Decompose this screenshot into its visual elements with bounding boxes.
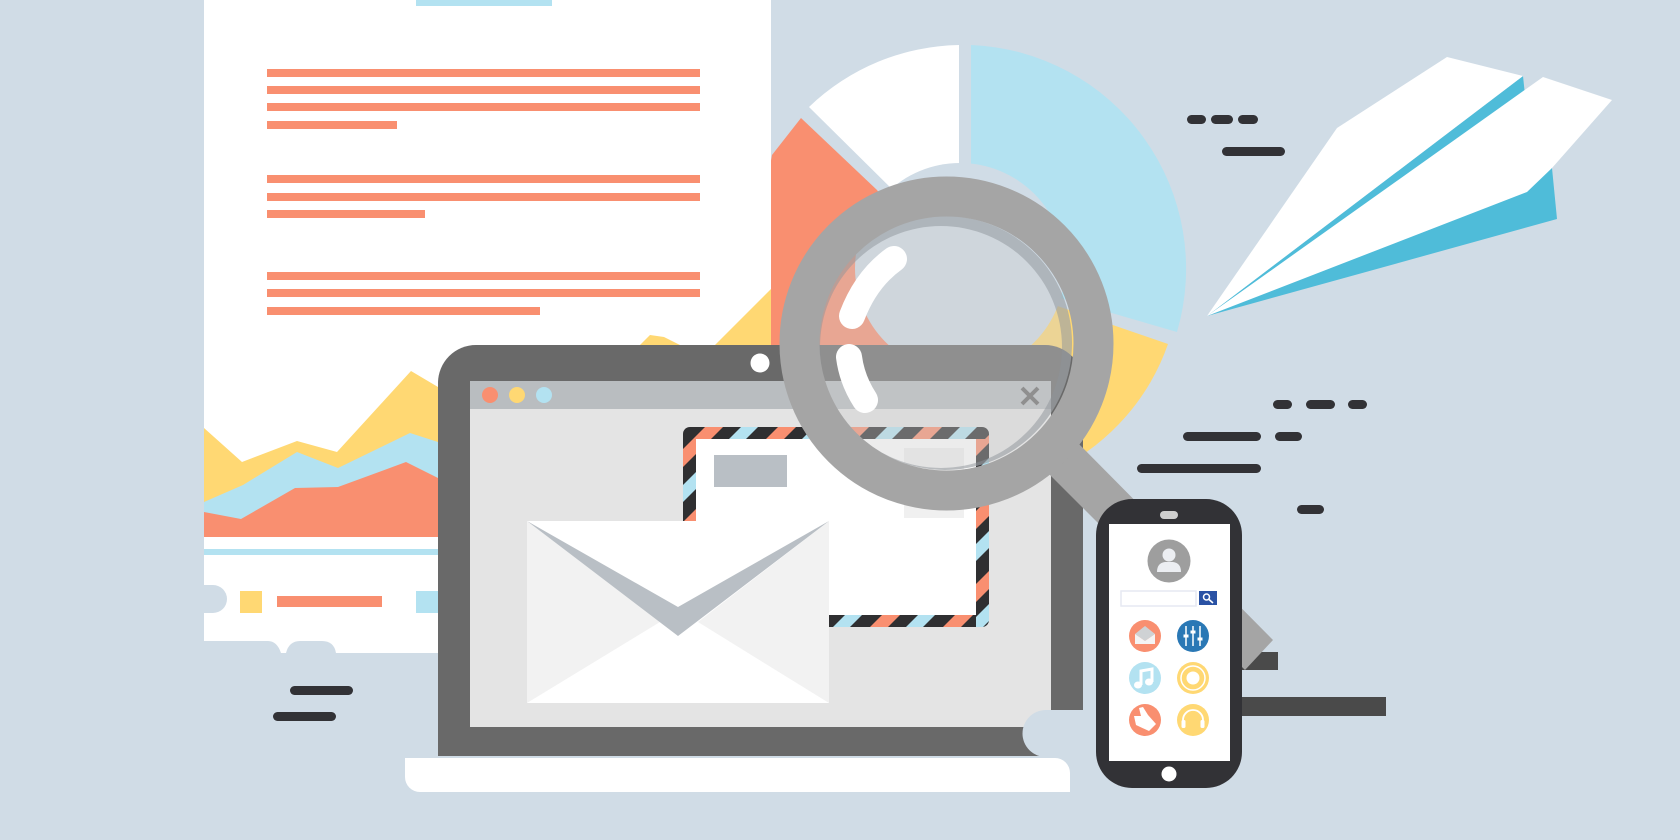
area chart — [204, 288, 772, 537]
legend notch — [204, 585, 227, 613]
text lines: paragraph 3 — [267, 272, 700, 315]
lens ring — [800, 196, 1094, 490]
laptop base — [405, 758, 1070, 792]
dark bars behind phone — [1230, 652, 1386, 716]
motion dashes: top — [1187, 115, 1285, 156]
pie chart — [738, 45, 1186, 468]
text lines: paragraph 2 — [267, 175, 700, 218]
corner cut-out — [1022, 710, 1090, 757]
motion dashes: right — [1137, 400, 1367, 514]
home button — [1162, 766, 1176, 782]
app icon: headphones — [1177, 704, 1209, 736]
pie slice: orange — [738, 118, 930, 345]
laptop — [405, 345, 1090, 792]
lens glass — [818, 216, 1072, 470]
pie slice: blue — [971, 45, 1186, 332]
area: blue — [204, 433, 438, 519]
pie slice: white — [809, 45, 959, 220]
legend bar: orange — [277, 596, 382, 607]
pie slice: yellow — [1000, 300, 1168, 468]
legend swatch: yellow — [240, 591, 262, 613]
plane fold: upper blue — [1207, 76, 1525, 316]
right wing — [1207, 77, 1612, 316]
highlight: lower — [849, 357, 865, 400]
speaker — [1160, 511, 1178, 519]
handle — [1045, 440, 1273, 670]
camera dot — [750, 354, 770, 372]
plane fold: lower blue — [1207, 168, 1557, 316]
paper plane — [1207, 57, 1612, 316]
address block — [714, 455, 787, 487]
document page — [204, 0, 772, 653]
envelope — [527, 521, 829, 703]
left wing — [1207, 57, 1523, 316]
search box — [1121, 591, 1196, 606]
app icon: thumbs up — [1129, 704, 1161, 736]
flap shadow — [527, 521, 829, 636]
area: yellow — [204, 289, 771, 502]
app icon: equalizer — [1177, 620, 1209, 652]
text lines: paragraph 1 — [267, 69, 700, 129]
app icon: music — [1129, 662, 1161, 694]
avatar icon — [1148, 540, 1190, 582]
letter paper — [696, 439, 976, 615]
highlight: upper — [852, 259, 894, 316]
lens inner shadow — [818, 216, 1072, 470]
legend swatch: blue — [416, 591, 446, 613]
top blue tab — [416, 0, 552, 6]
legend rule — [204, 549, 504, 555]
side fold: right — [698, 521, 829, 703]
close icon — [1022, 388, 1038, 404]
stamp — [904, 448, 964, 518]
striped right edge — [976, 439, 989, 627]
window dots — [482, 387, 552, 403]
pie hole — [855, 163, 1065, 373]
laptop screen — [470, 381, 1051, 727]
smartphone — [1096, 499, 1242, 788]
laptop bezel — [438, 345, 1083, 756]
page sheet — [204, 0, 771, 653]
search button — [1199, 591, 1217, 605]
magnifying glass — [800, 196, 1273, 670]
app icon: mail — [1129, 620, 1161, 652]
illustration: email and analytics scene — [204, 0, 1612, 792]
phone screen — [1109, 524, 1230, 761]
motion dashes: left — [273, 686, 353, 721]
torn page bottom edge — [204, 641, 336, 653]
area: orange — [204, 462, 438, 537]
app icon: ring — [1177, 662, 1209, 694]
phone body — [1096, 499, 1242, 788]
airmail letter — [683, 427, 989, 627]
striped border — [683, 427, 989, 627]
window title bar — [470, 381, 1051, 409]
side fold: left — [527, 521, 660, 703]
envelope body — [527, 521, 829, 703]
